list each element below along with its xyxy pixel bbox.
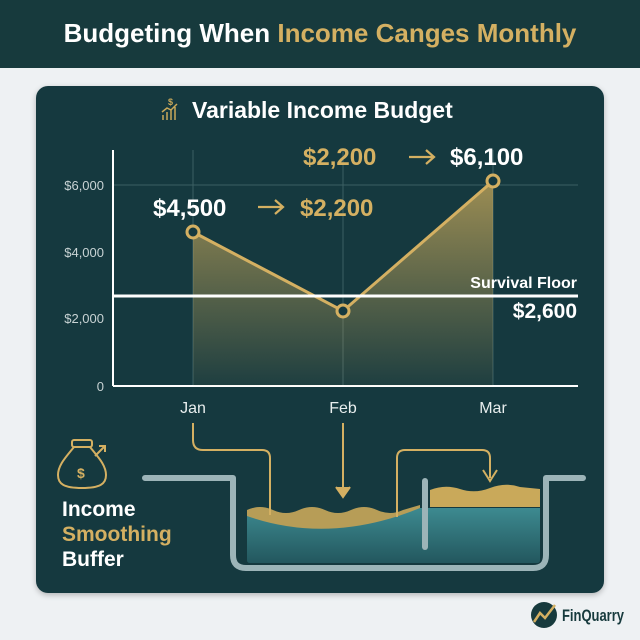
callout: jan to feb: $2,200 [300, 195, 373, 222]
survival floor line: $2,600 [513, 300, 577, 323]
area and line [187, 175, 499, 386]
y axis labels: $2,000 [64, 311, 104, 326]
survival floor line [113, 275, 578, 323]
y axis labels: 0 [97, 379, 104, 394]
panel heading: $ [168, 97, 173, 107]
y axis labels: $4,000 [64, 245, 104, 260]
y axis labels: $6,000 [64, 178, 104, 193]
arrows [193, 423, 497, 517]
tank [145, 478, 583, 568]
logo [531, 602, 624, 628]
buffer label: Buffer [62, 548, 124, 571]
panel heading: Variable Income Budget [192, 97, 453, 123]
axes [113, 150, 578, 386]
callout: jan to feb [153, 195, 373, 222]
icon: money bag: $ [77, 465, 85, 481]
y axis labels [64, 178, 104, 394]
buffer label [62, 498, 172, 571]
x axis labels: Jan [180, 400, 206, 417]
x axis labels: Mar [479, 400, 507, 417]
callout: feb to mar: $6,100 [450, 144, 523, 171]
icon: money bag [58, 440, 106, 488]
callout: feb to mar [303, 144, 523, 171]
grid lines [113, 150, 578, 386]
title: Budgeting When Income Canges Monthly [64, 18, 576, 48]
callout: feb to mar: $2,200 [303, 144, 376, 171]
callout: jan to feb: $4,500 [153, 195, 226, 222]
buffer label: Income [62, 498, 136, 521]
x axis labels [180, 400, 507, 417]
survival floor line: Survival Floor [470, 275, 577, 292]
panel: main [36, 86, 604, 593]
x axis labels: Feb [329, 400, 357, 417]
buffer label: Smoothing [62, 523, 172, 546]
header bar [0, 0, 640, 68]
